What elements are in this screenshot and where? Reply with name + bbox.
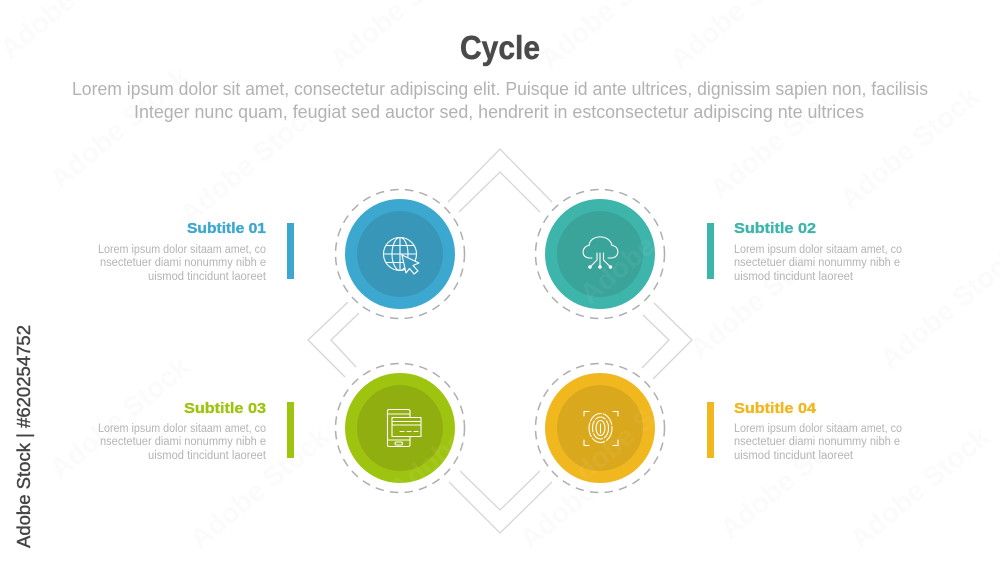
- panel: subtitle 01: nsectetuer diami nonummy nibh e: [100, 257, 266, 269]
- text: Adobe Stock: [834, 81, 985, 215]
- step 03: circle node: [336, 364, 464, 492]
- title: Cycle: [460, 29, 540, 66]
- text: Adobe Stock: [44, 351, 195, 485]
- icon: phone and payment card: [388, 410, 421, 446]
- text: Adobe Stock: [44, 61, 195, 195]
- description text: [72, 79, 928, 122]
- panel: subtitle 04: Subtitle 04: [734, 401, 816, 417]
- description text: Integer nunc quam, feugiat sed auctor sed, hendrerit in estconsectetur adipiscing nte ultrices: [134, 102, 864, 122]
- icon: cloud network: [583, 237, 618, 268]
- text: Adobe Stock: [684, 231, 835, 365]
- panel: subtitle 03: Subtitle 03: [184, 401, 266, 417]
- panel: subtitle 02: uismod tincidunt laoreet: [734, 271, 854, 283]
- panel: subtitle 03: Lorem ipsum dolor sitaam amet, co: [98, 423, 266, 435]
- panel: subtitle 04: uismod tincidunt laoreet: [734, 450, 854, 462]
- text: Adobe Stock: [844, 421, 995, 555]
- panel: subtitle 02: Subtitle 02: [734, 221, 816, 237]
- text: Adobe Stock: [714, 411, 865, 545]
- text: Adobe Stock: [574, 176, 725, 310]
- text: Adobe Stock: [174, 96, 325, 230]
- panel: subtitle 01: uismod tincidunt laoreet: [148, 271, 267, 283]
- panel: subtitle 01: [98, 221, 294, 283]
- text: Adobe Stock: [384, 371, 535, 505]
- panel: subtitle 04: Lorem ipsum dolor sitaam amet, co: [734, 423, 902, 435]
- cycle diamond frame: [308, 149, 692, 533]
- text: Adobe Stock: [704, 71, 855, 205]
- panel: subtitle 02: [707, 221, 902, 283]
- step 01: circle node: [336, 190, 464, 318]
- stock id vertical text: Adobe Stock | #620254752: [14, 325, 34, 548]
- panel: subtitle 02: Lorem ipsum dolor sitaam amet, co: [734, 244, 902, 256]
- text: Adobe Stock: [184, 421, 335, 555]
- panel: subtitle 03: uismod tincidunt laoreet: [148, 450, 267, 462]
- panel: subtitle 04: [707, 401, 902, 462]
- panel: subtitle 03: [98, 401, 294, 462]
- panel: subtitle 01: Subtitle 01: [187, 221, 266, 237]
- panel: subtitle 04: nsectetuer diami nonummy nibh e: [734, 436, 900, 448]
- description text: Lorem ipsum dolor sit amet, consectetur adipiscing elit. Puisque id ante ultrices, dignissim sapien non, facilisis: [72, 79, 928, 99]
- text: Adobe Stock: [514, 421, 665, 555]
- panel: subtitle 03: nsectetuer diami nonummy nibh e: [100, 436, 266, 448]
- text: Adobe Stock: [554, 366, 705, 500]
- step 04: circle node: [536, 364, 664, 492]
- icon: fingerprint scan: [584, 412, 618, 446]
- panel: subtitle 02: nsectetuer diami nonummy nibh e: [734, 257, 900, 269]
- step 02: circle node: [536, 190, 664, 318]
- icon: globe with cursor: [384, 238, 419, 274]
- panel: subtitle 01: Lorem ipsum dolor sitaam amet, co: [98, 244, 266, 256]
